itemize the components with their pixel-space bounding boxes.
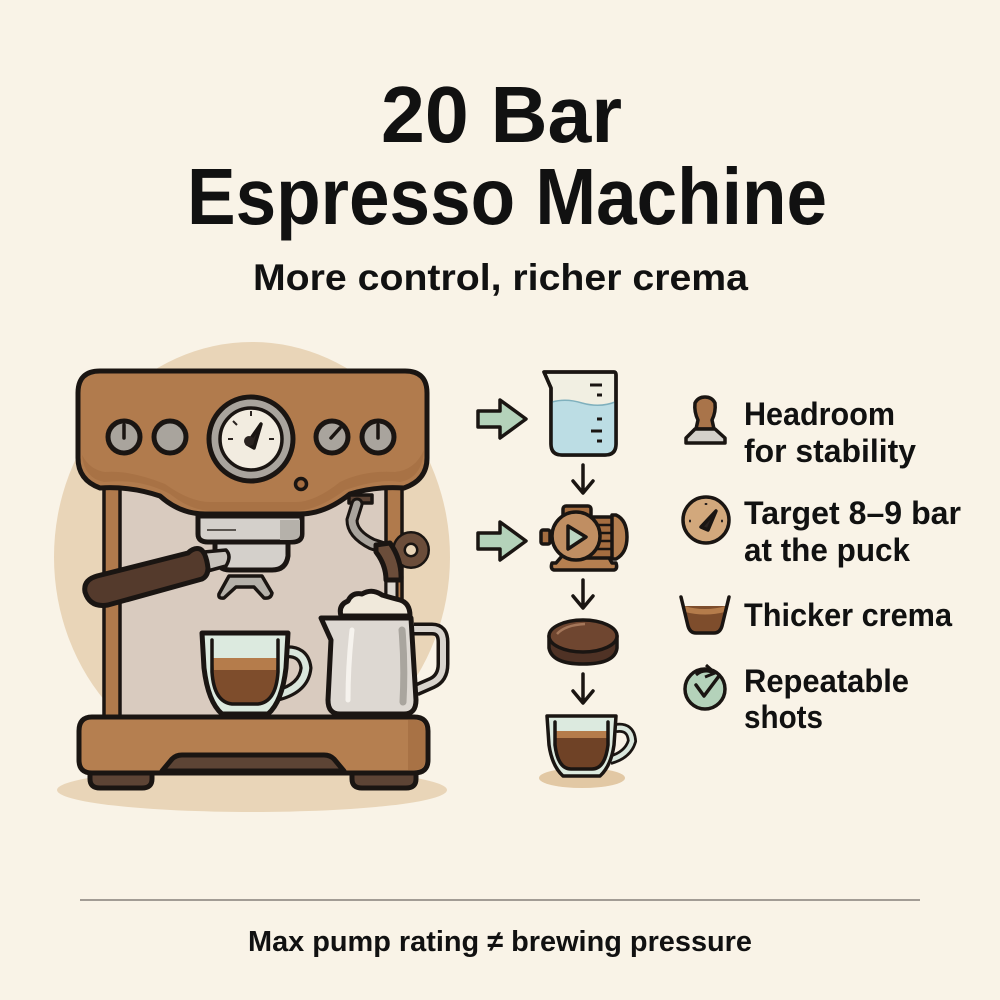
icon: crema cup xyxy=(681,597,729,633)
benefit: repeatable shots: Repeatable xyxy=(744,663,909,699)
input arrow: pump xyxy=(478,522,526,560)
arrow down 1 xyxy=(573,465,593,493)
icon: repeat check xyxy=(685,665,725,709)
benefit: thicker crema: Thicker crema xyxy=(744,597,952,633)
title: 20 Bar xyxy=(381,70,622,159)
icon: gauge xyxy=(683,497,729,543)
benefit: repeatable shots xyxy=(685,663,909,735)
icon: tamper xyxy=(686,397,725,443)
benefit: headroom for stability xyxy=(686,396,916,469)
milk jug xyxy=(321,618,443,714)
benefit: target 8-9 bar: at the puck xyxy=(744,532,910,568)
arrow down 2 xyxy=(573,580,593,608)
columns xyxy=(104,485,402,718)
steam wand xyxy=(349,495,423,611)
arrow down 3 xyxy=(573,674,593,703)
back panel xyxy=(119,485,387,717)
input arrow: water xyxy=(478,400,526,438)
group head and portafilter basket xyxy=(198,516,302,598)
benefit: headroom for stability: Headroom xyxy=(744,396,895,432)
knobs xyxy=(108,421,394,490)
icon: finished espresso cup xyxy=(539,716,632,788)
icon: coffee puck xyxy=(549,620,617,664)
icon: pump xyxy=(541,506,627,570)
benefit: target 8-9 bar xyxy=(683,495,961,568)
footer note: Max pump rating ≠ brewing pressure xyxy=(248,926,752,958)
espresso cup xyxy=(202,633,306,714)
pressure gauge xyxy=(209,397,293,481)
illustration: espresso machine xyxy=(54,342,450,812)
base xyxy=(79,717,428,773)
portafilter handle xyxy=(85,548,229,605)
benefit: headroom for stability: for stability xyxy=(744,433,916,469)
benefit: repeatable shots: shots xyxy=(744,699,823,735)
head shading xyxy=(82,450,424,511)
title xyxy=(187,70,827,241)
machine head xyxy=(78,371,427,514)
title: Espresso Machine xyxy=(187,152,827,241)
feet xyxy=(90,772,416,788)
icon: water beaker xyxy=(544,372,616,455)
benefit: target 8-9 bar: Target 8–9 bar xyxy=(744,495,961,531)
milk foam xyxy=(340,591,410,616)
subtitle: More control, richer crema xyxy=(253,257,748,298)
